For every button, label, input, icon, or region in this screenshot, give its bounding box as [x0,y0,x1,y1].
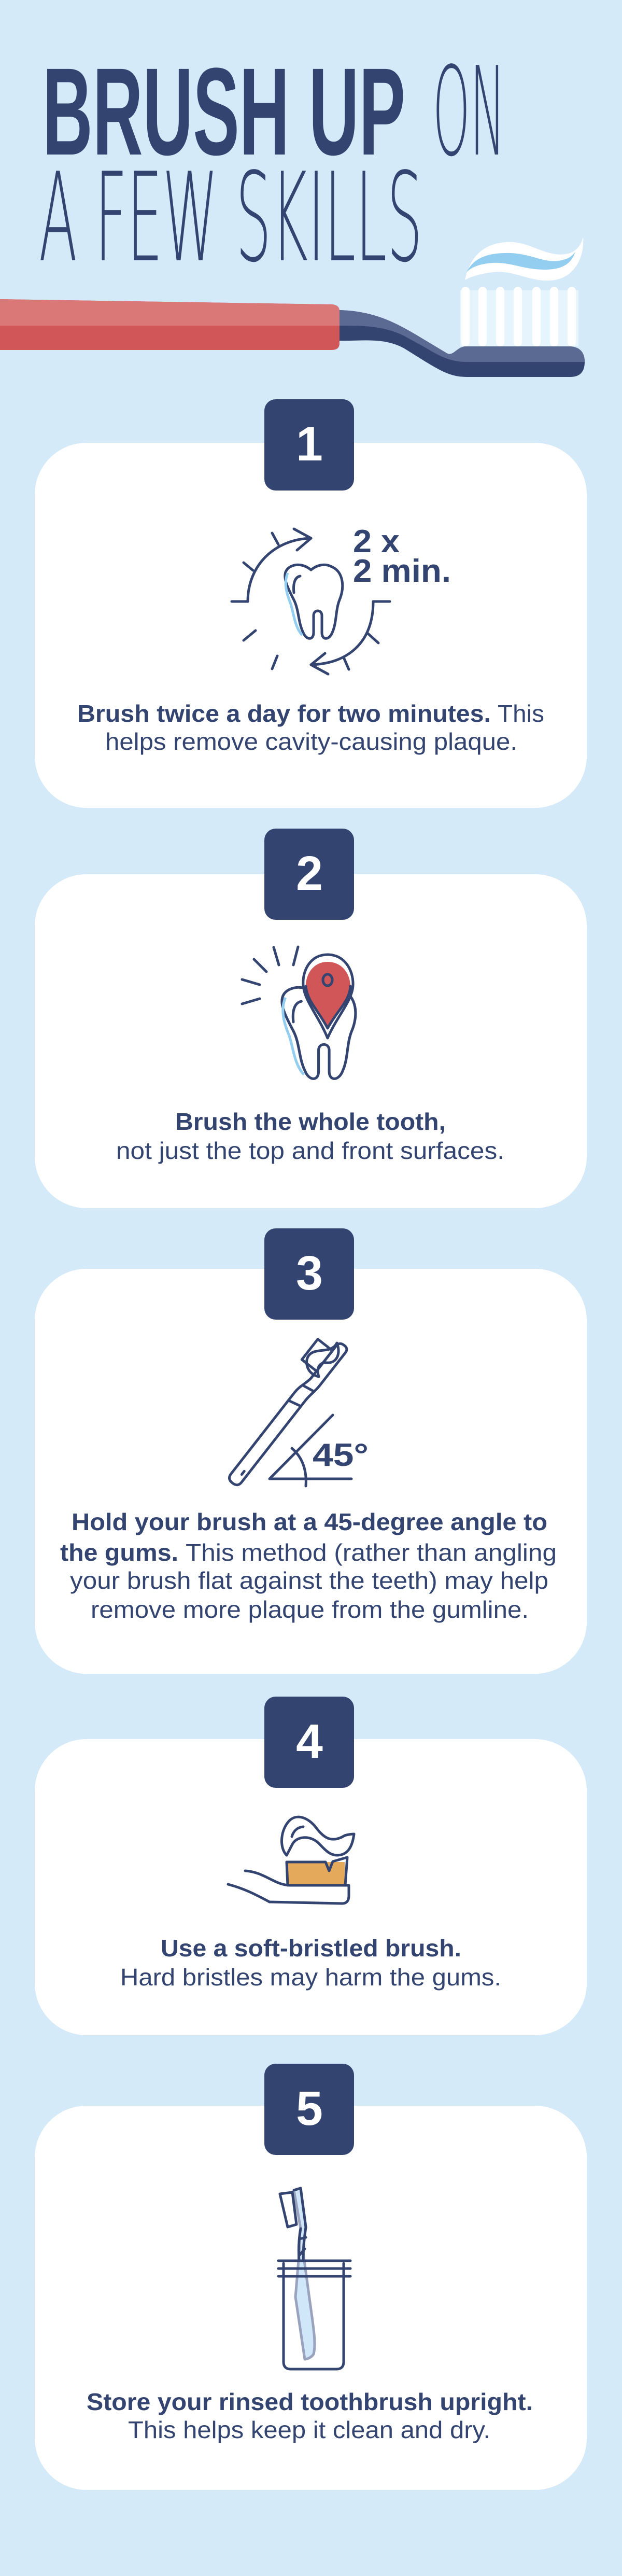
text: step 5 [87,2388,533,2443]
text: step 1: Brush twice a day for two minutes. [77,700,491,727]
text: step 1: helps remove cavity-causing plaque. [105,728,517,755]
text: step 4: Use a soft-bristled brush. [161,1935,461,1962]
text: step 2 [116,1108,504,1164]
title [39,40,505,289]
badge: 3 [264,1228,354,1320]
text: step 4 [120,1935,501,1991]
badge: 3: 3 [296,1246,323,1300]
text: step 3 [60,1508,557,1623]
icon: toothbrush at 45 degrees [216,1330,369,1489]
icon: tooth with rotating arrows [232,524,451,674]
icon: tooth with rotating arrows: 2 x [353,524,400,559]
panel: step 5 [35,2064,587,2490]
panel: step 1 [35,399,587,808]
illustration: toothbrush header [0,237,585,377]
badge: 4 [264,1697,354,1788]
badge: 4: 4 [296,1714,323,1768]
badge: 2 [264,829,354,920]
text: step 3: your brush flat against the teeth) may help [70,1567,548,1594]
text: step 3: the gums. [60,1539,178,1566]
panel: step 3 [35,1228,587,1674]
text: step 3: remove more plaque from the gumline. [91,1596,529,1623]
text: step 1: This [498,700,544,727]
icon: soft-bristled brush with paste [228,1817,354,1903]
badge: 5: 5 [296,2081,323,2135]
text: step 4: Hard bristles may harm the gums. [120,1964,501,1991]
text: step 5: Store your rinsed toothbrush upright. [87,2388,533,2415]
text: step 2: Brush the whole tooth, [175,1108,446,1135]
badge: 5 [264,2064,354,2155]
panel: step 2 [35,829,587,1208]
text: ON [433,40,505,184]
icon: tooth with rotating arrows: 2 min. [353,553,451,589]
text: step 2: not just the top and front surfaces. [116,1137,504,1164]
badge: 1: 1 [296,417,323,471]
badge: 2: 2 [296,846,323,900]
icon: toothbrush in cup [278,2188,350,2369]
text: step 5: This helps keep it clean and dry. [128,2416,490,2443]
text: step 3: This method (rather than angling [186,1539,557,1566]
badge: 1 [264,399,354,491]
text: step 3: Hold your brush at a 45-degree angle to [72,1508,547,1535]
icon: tooth with location pin [242,947,356,1079]
panel: step 4 [35,1697,587,2035]
icon: toothbrush at 45 degrees: 45° [313,1437,369,1473]
text: step 1 [77,700,544,755]
